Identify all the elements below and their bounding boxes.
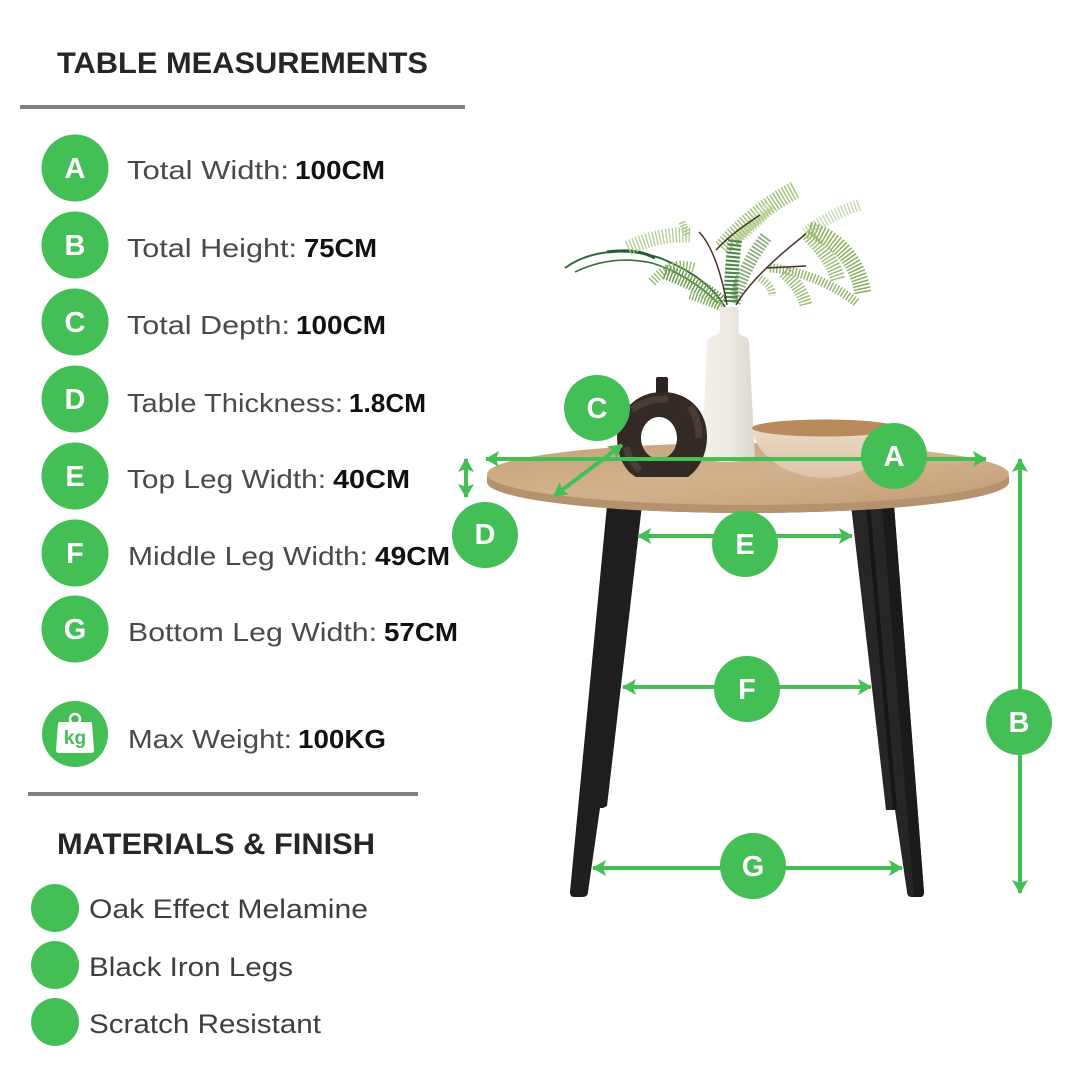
dimension D: table thickness arrow and badge: D [475, 519, 495, 551]
table legs [570, 505, 924, 897]
white ceramic vase [702, 307, 755, 462]
material: oak effect melamine [31, 884, 368, 932]
measurement row F: middle leg width: Middle Leg Width: [128, 541, 368, 571]
dimension E: top leg width arrow and badge: E [735, 529, 755, 561]
table top [487, 443, 1009, 513]
measurement row: max weight with kg icon: kg [64, 728, 86, 749]
measurement row: max weight with kg icon: Max Weight: [128, 724, 292, 754]
dimension F: middle leg width arrow and badge [623, 656, 871, 722]
wooden bowl [752, 420, 898, 478]
heading: materials and finish: MATERIALS & FINISH [57, 828, 375, 861]
title: table measurements: TABLE MEASUREMENTS [57, 47, 428, 80]
measurement row F: middle leg width [42, 520, 450, 586]
material: black iron legs: Black Iron Legs [89, 952, 293, 982]
measurement row C: total depth: C [65, 307, 86, 339]
plant fronds [565, 190, 863, 307]
dimension B: total height arrow and badge: B [1009, 707, 1029, 739]
measurement row G: bottom leg width [42, 596, 458, 662]
measurement row F: middle leg width: F [66, 538, 84, 570]
material: black iron legs [31, 941, 293, 989]
dimension G: bottom leg width arrow and badge: G [742, 851, 764, 883]
measurement row G: bottom leg width: G [64, 614, 86, 646]
measurement row E: top leg width [42, 442, 410, 510]
dimension D: table thickness arrow and badge [452, 459, 518, 568]
measurement row E: top leg width: E [65, 461, 85, 493]
measurement row E: top leg width: Top Leg Width: [127, 464, 326, 494]
dimension G: bottom leg width arrow and badge [593, 833, 902, 899]
measurement row D: table thickness [42, 366, 426, 432]
measurement row C: total depth: Total Depth: [127, 310, 290, 340]
measurement row G: bottom leg width: 57CM [384, 617, 458, 647]
measurement row A: total width: Total Width: [127, 155, 289, 185]
measurement row F: middle leg width: 49CM [375, 541, 450, 571]
measurement row D: table thickness: 1.8CM [349, 388, 426, 418]
measurement row E: top leg width: 40CM [333, 464, 410, 494]
measurement row G: bottom leg width: Bottom Leg Width: [128, 617, 377, 647]
dimension E: top leg width arrow and badge [638, 511, 852, 577]
measurement row: max weight with kg icon: 100KG [298, 724, 386, 754]
measurement row B: total height: Total Height: [127, 233, 297, 263]
dimension C: total depth arrow and badge: C [587, 393, 608, 425]
table illustration with decor [487, 190, 1009, 897]
dimension A: total width arrow and badge: A [884, 441, 905, 473]
measurement row C: total depth [42, 288, 386, 356]
dimension B: total height arrow and badge [986, 459, 1052, 893]
measurement row B: total height: 75CM [304, 233, 377, 263]
measurement row D: table thickness: Table Thickness: [127, 388, 343, 418]
dimension A: total width arrow and badge [486, 423, 986, 489]
measurement row A: total width: A [65, 153, 86, 185]
measurement row B: total height [42, 212, 377, 278]
dimension C: total depth arrow and badge [554, 375, 630, 496]
dimension F: middle leg width arrow and badge: F [738, 674, 756, 706]
measurement row D: table thickness: D [65, 384, 85, 416]
measurement row C: total depth: 100CM [296, 310, 386, 340]
measurement row A: total width: 100CM [295, 155, 385, 185]
measurement row A: total width [42, 134, 385, 202]
measurement row: max weight with kg icon [42, 701, 386, 767]
material: scratch resistant: Scratch Resistant [89, 1009, 322, 1039]
material: scratch resistant [31, 998, 322, 1046]
material: oak effect melamine: Oak Effect Melamine [89, 894, 368, 924]
measurement row B: total height: B [65, 230, 85, 262]
dark ring vase [617, 377, 707, 477]
